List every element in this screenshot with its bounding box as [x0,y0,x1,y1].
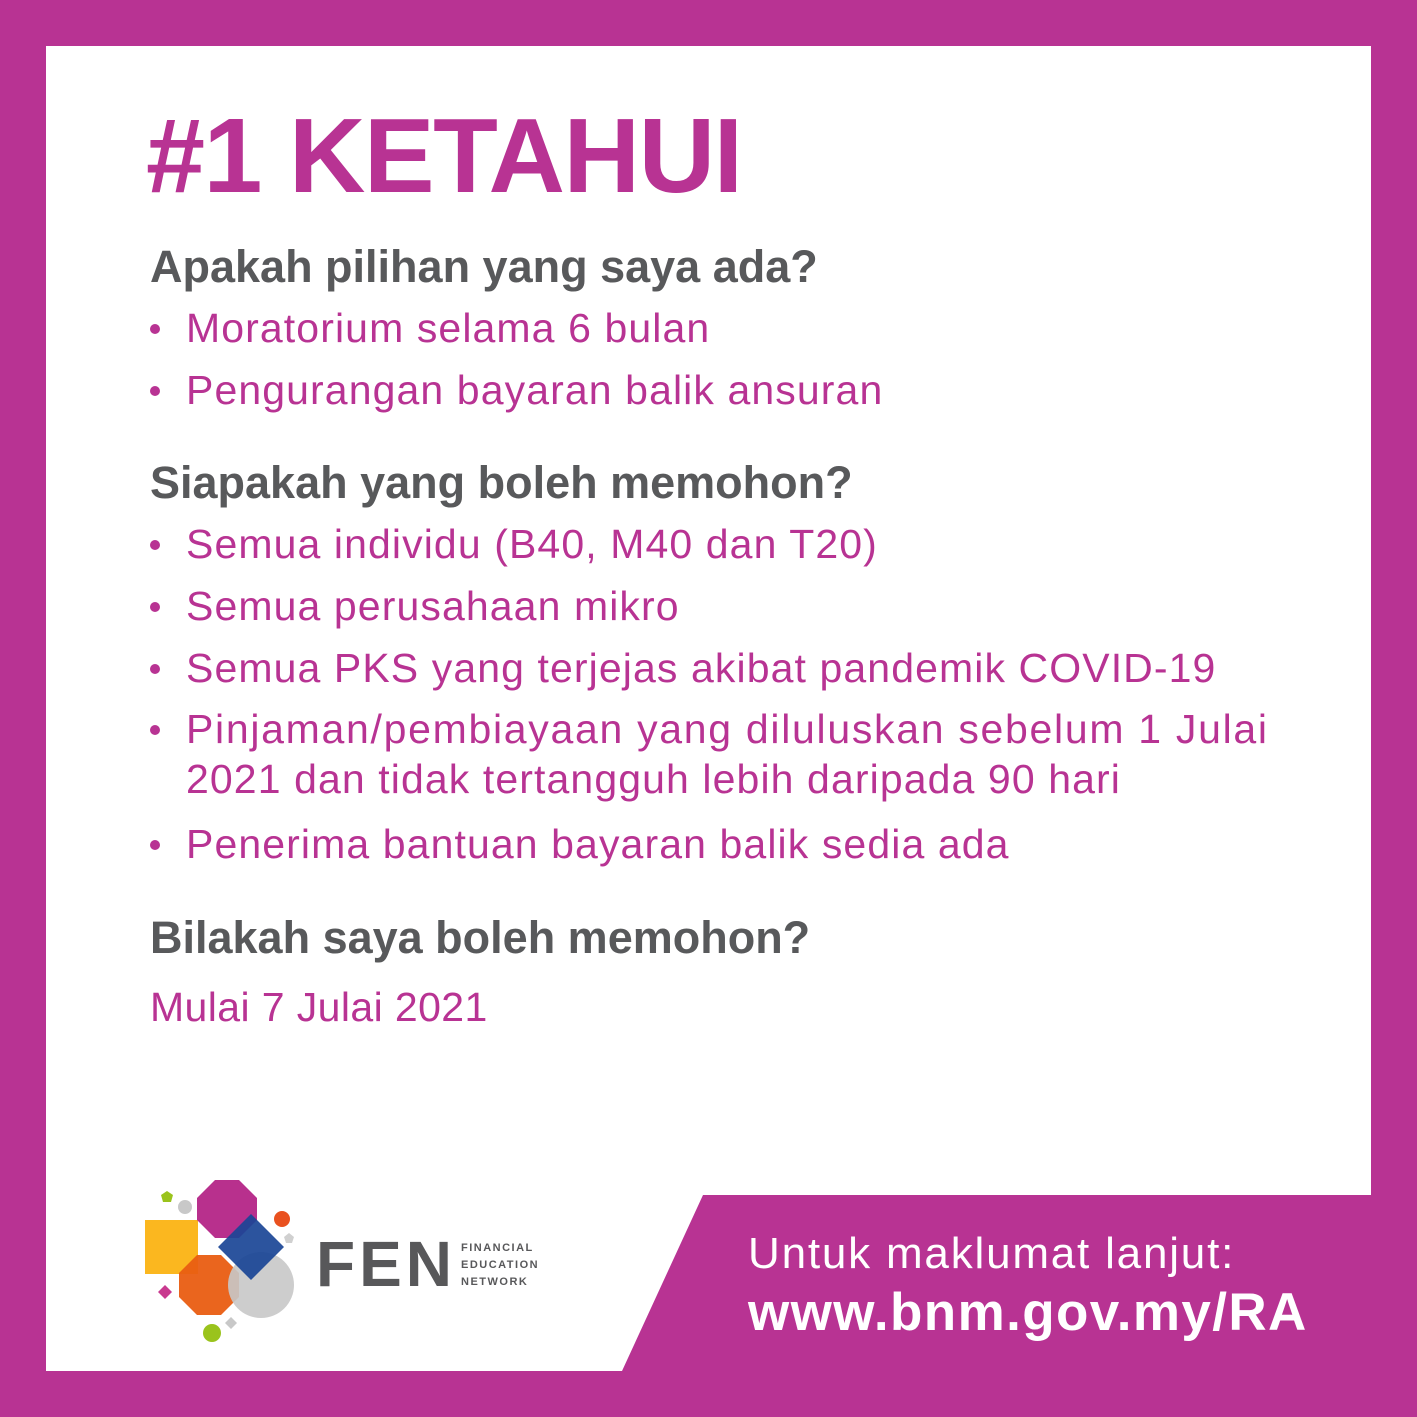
bullet list: eligibility: Semua individu (B40, M40 dan T20) [186,521,878,567]
bullet list: eligibility [150,521,1269,867]
bullet list: options: Moratorium selama 6 bulan [186,305,710,351]
bullet list: eligibility: Semua perusahaan mikro [186,583,680,629]
bullet list: eligibility: Pinjaman/pembiayaan yang diluluskan sebelum 1 Julai [186,706,1269,752]
bullet list: options: Pengurangan bayaran balik ansuran [186,367,883,413]
title: #1 KETAHUI [146,97,742,215]
bullet list: eligibility: 2021 dan tidak tertangguh lebih daripada 90 hari [186,756,1121,802]
logo: FEN [145,1180,539,1342]
logo: FEN: NETWORK [461,1276,528,1288]
text: date: Mulai 7 Julai 2021 [150,984,488,1030]
heading: who can apply: Siapakah yang boleh memohon? [150,457,853,508]
logo: FEN: EDUCATION [461,1259,539,1271]
logo: FEN: FEN [316,1228,456,1300]
footer: more info: www.bnm.gov.my/RA [748,1283,1308,1342]
bullet list: eligibility: Semua PKS yang terjejas akibat pandemik COVID-19 [186,645,1216,691]
footer: more info: Untuk maklumat lanjut: [748,1229,1235,1278]
logo: FEN: FINANCIAL [461,1242,534,1254]
bullet list: eligibility: Penerima bantuan bayaran balik sedia ada [186,821,1010,867]
heading: options: Apakah pilihan yang saya ada? [150,241,818,292]
footer: more info [748,1229,1308,1342]
bullet list: options [150,305,883,413]
heading: when: Bilakah saya boleh memohon? [150,912,810,963]
